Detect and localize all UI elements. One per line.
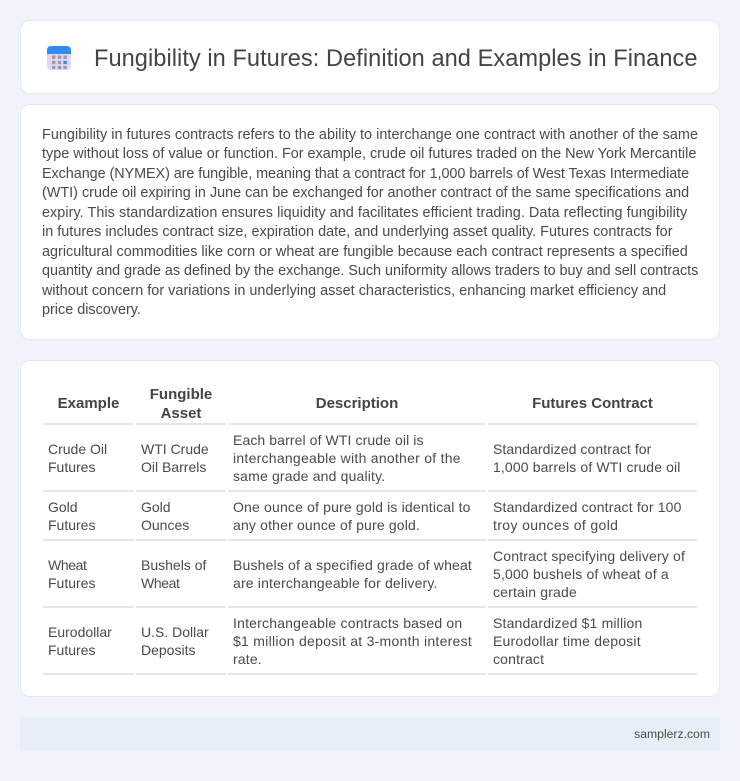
paragraph text <box>42 127 698 318</box>
table row: wheat: Bushels of <box>141 557 206 573</box>
table header: Asset <box>161 405 201 422</box>
table row: crude oil: WTI Crude <box>141 441 209 457</box>
table row: eurodollar: contract <box>493 651 544 667</box>
paragraph text: type without loss of value or function. For example, crude oil futures traded on the New York Mercantile <box>42 146 696 162</box>
paragraph text: without concern for variations in underlying asset characteristics, enhancing market efficiency and <box>42 283 666 299</box>
table row: gold: Futures <box>48 517 95 533</box>
table row: crude oil: Oil Barrels <box>141 459 206 475</box>
table row: crude oil: Each barrel of WTI crude oil is <box>233 432 424 448</box>
table row: eurodollar: $1 million deposit at 3-month interest <box>233 633 472 649</box>
table row: eurodollar: U.S. Dollar <box>141 624 209 640</box>
table row: eurodollar: Eurodollar time deposit <box>493 633 641 649</box>
paragraph text: agricultural commodities like corn or wheat are fungible because each contract represents a specified <box>42 244 688 260</box>
footer bar <box>20 717 720 751</box>
table row: wheat: are interchangeable for delivery. <box>233 575 438 591</box>
table row: gold: Standardized contract for 100 <box>493 499 682 515</box>
table row: crude oil: Crude Oil <box>48 441 107 457</box>
table row: gold <box>43 499 697 541</box>
table row: wheat <box>43 548 697 608</box>
table row: eurodollar: Eurodollar <box>48 624 112 640</box>
paragraph text: (WTI) crude oil expiring in June can be exchanged for another contract of the same specifications and <box>42 185 689 201</box>
table header: Example <box>58 395 119 412</box>
table row: eurodollar <box>43 615 697 675</box>
table header: Description <box>316 395 398 412</box>
paragraph text: in futures includes contract size, expiration date, and underlying asset quality. Futures contracts for <box>42 224 673 240</box>
table row: crude oil: interchangeable with another of the <box>233 450 461 466</box>
table row: wheat: 5,000 bushels of wheat of a <box>493 566 669 582</box>
paragraph text: expiry. This standardization ensures liquidity and facilitates efficient trading. Data reflecting fungibility <box>42 205 687 221</box>
table row: gold: One ounce of pure gold is identical to <box>233 499 471 515</box>
table row: wheat: Contract specifying delivery of <box>493 548 685 564</box>
table row: wheat: Bushels of a specified grade of wheat <box>233 557 472 573</box>
title: Fungibility in Futures: Definition and Examples in Finance <box>94 46 698 72</box>
paragraph text: price discovery. <box>42 302 141 318</box>
table row: gold: Gold <box>141 499 171 515</box>
table row: eurodollar: Standardized $1 million <box>493 615 642 631</box>
table row: eurodollar: Interchangeable contracts based on <box>233 615 462 631</box>
table row: crude oil: Futures <box>48 459 95 475</box>
header panel <box>20 20 720 94</box>
table header: Futures Contract <box>532 395 653 412</box>
panel: definition paragraph <box>20 104 720 340</box>
table row: wheat: Wheat <box>48 557 86 573</box>
table header <box>43 386 697 425</box>
footer source text: samplerz.com <box>634 727 710 741</box>
table row: eurodollar: Futures <box>48 642 95 658</box>
table row: wheat: Futures <box>48 575 95 591</box>
table row: eurodollar: rate. <box>233 651 262 667</box>
table row: crude oil <box>43 432 697 492</box>
table row: eurodollar: Deposits <box>141 642 195 658</box>
paragraph text: quantity and grade as defined by the exchange. Such uniformity allows traders to buy and sell contracts <box>42 263 698 279</box>
table row: crude oil: Standardized contract for <box>493 441 651 457</box>
table row: gold: any other ounce of pure gold. <box>233 517 420 533</box>
panel: examples table <box>20 360 720 697</box>
table row: gold: troy ounces of gold <box>493 517 618 533</box>
table row: gold: Ounces <box>141 517 189 533</box>
table row: crude oil: 1,000 barrels of WTI crude oil <box>493 459 681 475</box>
paragraph text: Exchange (NYMEX) are fungible, meaning that a contract for 1,000 barrels of West Texas Intermediate <box>42 166 689 182</box>
table row: gold: Gold <box>48 499 78 515</box>
table header: Fungible <box>150 386 212 403</box>
icon: calendar <box>47 46 71 70</box>
paragraph text: Fungibility in futures contracts refers to the ability to interchange one contract with another of the same <box>42 127 698 143</box>
table row: wheat: certain grade <box>493 584 577 600</box>
table row: crude oil: same grade and quality. <box>233 468 385 484</box>
table row: wheat: Wheat <box>141 575 179 591</box>
